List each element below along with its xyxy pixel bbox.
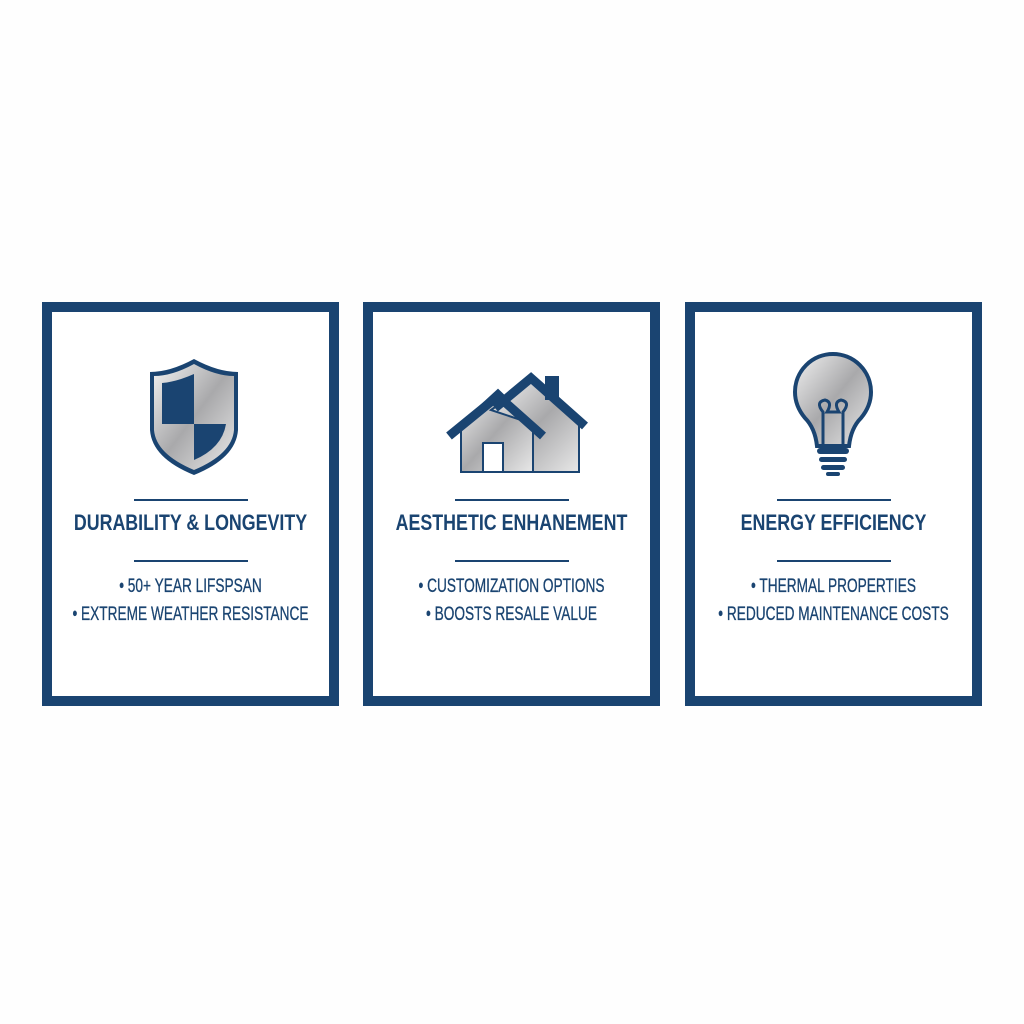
icon: light bulb — [793, 352, 873, 476]
title: ENERGY EFFICIENCY — [741, 510, 926, 535]
panel: aesthetic — [363, 302, 660, 706]
bullets: • REDUCED MAINTENANCE COSTS — [718, 604, 949, 625]
bullets — [418, 576, 604, 625]
bullets — [72, 576, 309, 625]
panel: durability — [42, 302, 339, 706]
title: AESTHETIC ENHANEMENT — [396, 510, 627, 535]
icon: shield — [150, 359, 238, 475]
bullets: • 50+ YEAR LIFSPSAN — [119, 576, 262, 597]
title: DURABILITY & LONGEVITY — [74, 510, 307, 535]
bullets: • EXTREME WEATHER RESISTANCE — [72, 604, 309, 625]
bullets: • BOOSTS RESALE VALUE — [426, 604, 597, 625]
panel: energy — [685, 302, 982, 706]
bullets: • THERMAL PROPERTIES — [751, 576, 916, 597]
icon: house — [446, 372, 588, 473]
bullets: • CUSTOMIZATION OPTIONS — [419, 576, 604, 597]
bullets — [718, 576, 949, 625]
